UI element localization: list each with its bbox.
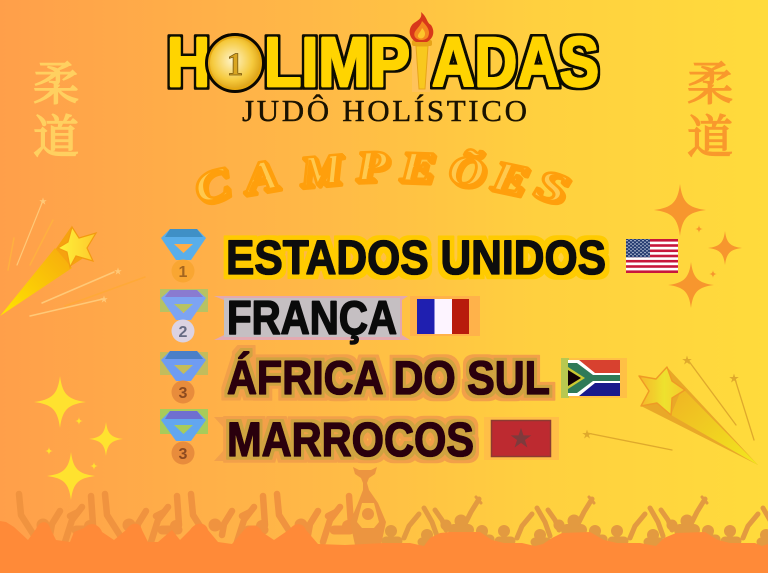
icon: kanji right bbox=[687, 48, 733, 167]
title wordmark: O bbox=[212, 23, 258, 101]
flag: Morocco: ★ bbox=[510, 426, 532, 451]
row: Marrocos bbox=[214, 414, 559, 467]
title wordmark bbox=[167, 23, 599, 101]
icon: kanji right: 道 bbox=[687, 101, 733, 167]
icon: kanji left bbox=[33, 48, 79, 167]
label backing: França bbox=[214, 296, 410, 340]
icon: shooting star left: ★ bbox=[100, 295, 108, 304]
icon: shooting star right: ★ bbox=[582, 430, 592, 441]
icon: shooting star right bbox=[582, 356, 758, 465]
icon: shooting star right: ★ bbox=[682, 356, 692, 367]
country name: França: FRANÇA bbox=[227, 291, 397, 344]
title wordmark: I bbox=[414, 23, 428, 101]
medal: first place: 1 bbox=[179, 264, 188, 281]
heading: campeões arc: E bbox=[398, 143, 436, 192]
icon: sparkles left bbox=[34, 376, 123, 500]
country name: África do Sul: ÁFRICA DO SUL bbox=[227, 351, 550, 404]
title wordmark: H bbox=[167, 23, 210, 101]
icon: shooting star right: ★ bbox=[729, 374, 739, 385]
medal: first place bbox=[161, 229, 206, 282]
icon: torch bbox=[410, 12, 433, 92]
row: França bbox=[214, 291, 480, 344]
crowd silhouette bbox=[0, 467, 768, 573]
medal: third place Marrocos bbox=[160, 409, 208, 464]
medal: second place bbox=[160, 289, 208, 342]
subtitle: JUDÔ HOLÍSTICO bbox=[242, 93, 527, 128]
flag: Morocco bbox=[484, 417, 559, 460]
icon: shooting star left: ★ bbox=[114, 267, 122, 276]
label backing: Marrocos bbox=[214, 417, 236, 461]
title wordmark: LIMP bbox=[264, 23, 410, 101]
flag: South Africa bbox=[561, 358, 627, 398]
heading: campeões arc: E bbox=[487, 152, 532, 205]
icon: gold coin: 1 bbox=[227, 47, 243, 83]
icon: kanji right: 柔 bbox=[687, 48, 733, 114]
medal: third place Marrocos: 3 bbox=[179, 446, 188, 463]
medal: third place Africa do Sul: 3 bbox=[179, 385, 188, 402]
row: Estados Unidos bbox=[226, 232, 678, 285]
raised arms right bbox=[385, 497, 768, 542]
flag: France bbox=[410, 296, 480, 336]
title logo bbox=[167, 12, 599, 128]
country name: Marrocos: MARROCOS bbox=[227, 414, 474, 467]
heading: campeões arc: S bbox=[529, 159, 574, 214]
icon: trophy winner bbox=[350, 467, 386, 545]
heading: campeões arc: P bbox=[354, 143, 389, 190]
icon: kanji left: 柔 bbox=[33, 48, 79, 114]
country name: Estados Unidos: ESTADOS UNIDOS bbox=[226, 232, 606, 285]
flag: USA bbox=[626, 239, 678, 273]
icon: kanji left: 道 bbox=[33, 101, 79, 167]
heading: campeões arc bbox=[188, 143, 574, 214]
medal: second place: 2 bbox=[179, 324, 188, 341]
raised arms left bbox=[19, 494, 354, 542]
icon: sparkles right bbox=[654, 184, 742, 308]
heading: campeões arc: A bbox=[237, 151, 283, 203]
icon: gold coin bbox=[205, 33, 265, 93]
title wordmark: ADAS bbox=[432, 23, 599, 101]
heading: campeões arc: Õ bbox=[446, 146, 487, 197]
medal: third place Africa do Sul bbox=[160, 351, 208, 404]
icon: shooting star left: ★ bbox=[39, 197, 47, 206]
crowd mass bbox=[0, 521, 768, 573]
row: África do Sul bbox=[227, 351, 627, 404]
icon: shooting star left bbox=[0, 197, 145, 316]
heading: campeões arc: M bbox=[297, 144, 346, 195]
heading: campeões arc: C bbox=[188, 158, 237, 214]
